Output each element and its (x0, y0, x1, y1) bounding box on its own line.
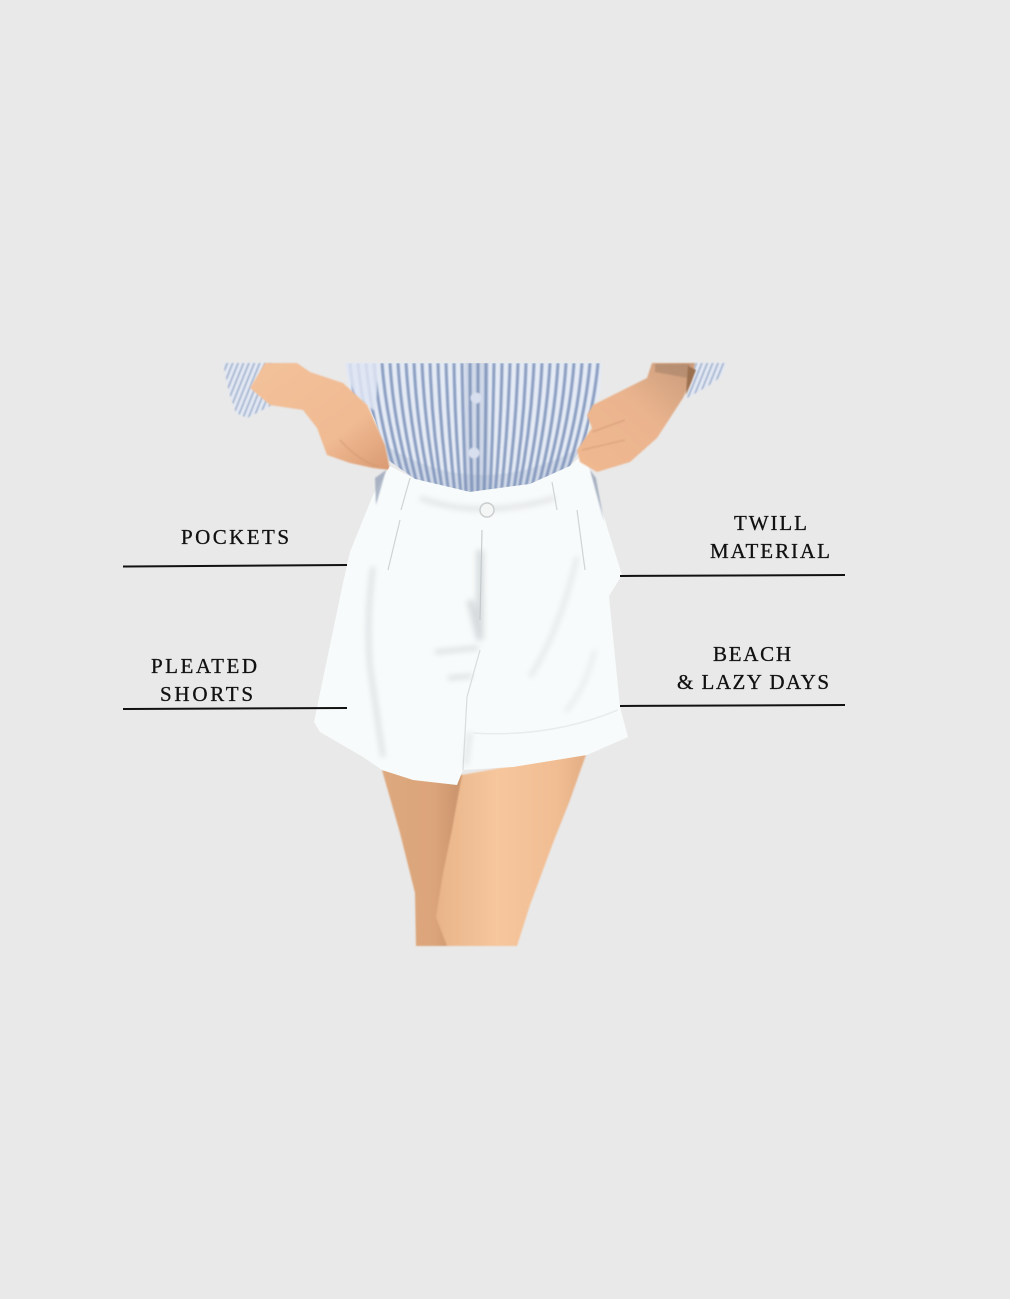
hand finger shadows (340, 420, 625, 466)
label: beach and lazy days (620, 642, 845, 706)
legs (382, 752, 587, 946)
waistband button (480, 503, 494, 517)
label: pleated shorts (123, 654, 347, 709)
right sleeve (687, 363, 726, 398)
left arm and hand (250, 363, 390, 470)
infographic canvas (123, 362, 845, 947)
shorts folds and pleats (369, 498, 595, 765)
label: pockets: POCKETS (181, 525, 289, 549)
white shorts (314, 458, 628, 785)
watch and wrist shading (655, 364, 690, 378)
label: beach and lazy days: & LAZY DAYS (677, 670, 829, 694)
shirt buttons (468, 392, 482, 458)
label: twill material (620, 511, 845, 576)
label: pleated shorts: SHORTS (160, 682, 253, 706)
left sleeve (223, 363, 272, 418)
shirt (345, 363, 602, 492)
shirt shadow beside shorts (375, 470, 386, 505)
label: beach and lazy days: BEACH (713, 642, 791, 666)
label: twill material: TWILL (734, 511, 807, 535)
waistband seams (388, 478, 585, 770)
right arm and hand (577, 363, 695, 472)
label: pleated shorts: PLEATED (151, 654, 257, 678)
photo: model wearing white shorts (223, 360, 726, 946)
label: twill material: MATERIAL (710, 539, 830, 563)
